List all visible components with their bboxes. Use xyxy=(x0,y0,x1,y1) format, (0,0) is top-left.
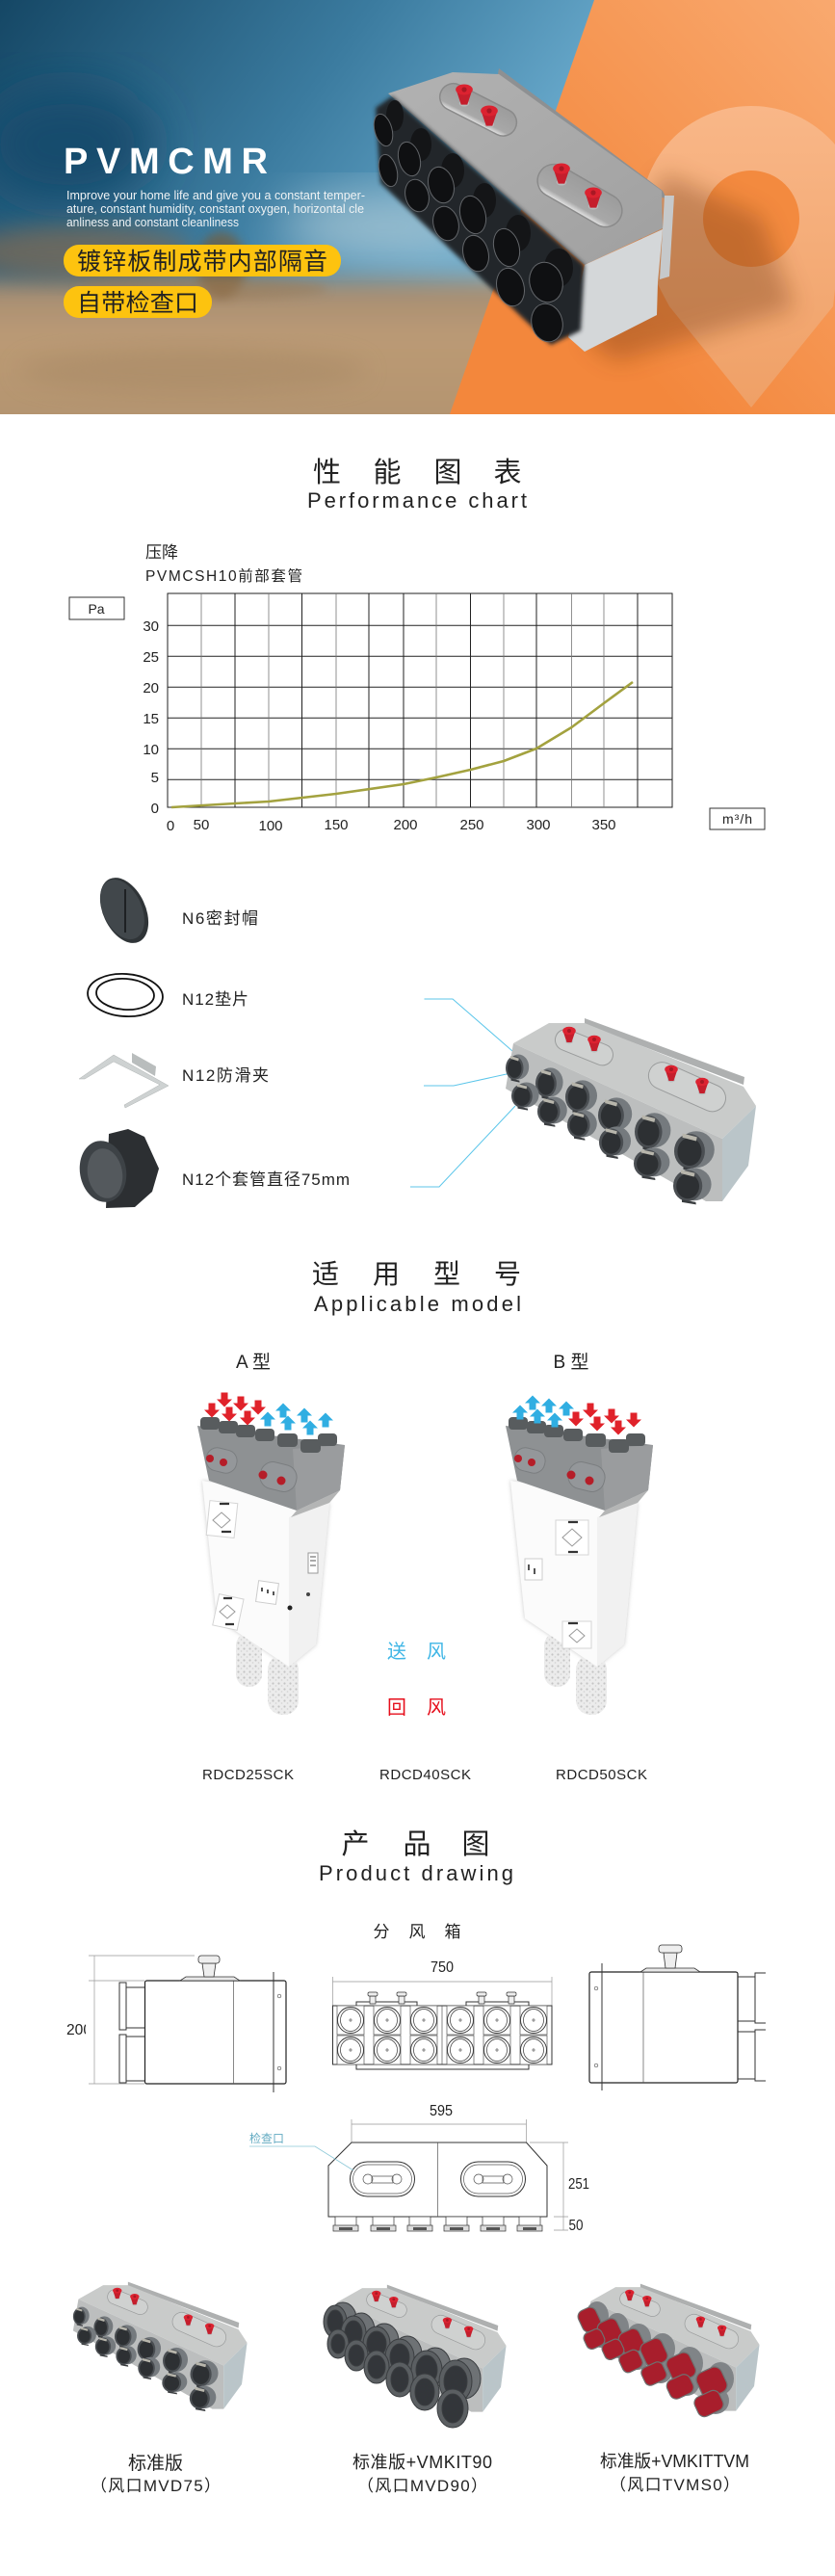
accessory: gasket: N12垫片 xyxy=(182,990,248,1009)
heading: product drawing: Product drawing xyxy=(319,1861,513,1885)
heading: applicable model: 适 xyxy=(312,1259,339,1289)
drawing: top view xyxy=(249,2103,589,2234)
x axis labels: 100 xyxy=(258,818,283,834)
x axis labels xyxy=(167,817,616,834)
x axis labels: 50 xyxy=(194,817,209,833)
accessory: gasket xyxy=(87,971,248,1019)
accessory: anti-slip clip: N12防滑夹 xyxy=(182,1066,269,1085)
hero description xyxy=(67,191,364,226)
x axis labels: 300 xyxy=(526,817,551,833)
model names: RDCD40SCK xyxy=(379,1767,471,1783)
chart titles xyxy=(145,543,302,585)
heading: applicable model: Applicable model xyxy=(314,1292,521,1316)
model names: RDCD50SCK xyxy=(556,1767,647,1783)
legend: return air: 回 xyxy=(387,1697,406,1719)
drawing: front view: 750 xyxy=(431,1959,454,1976)
product: standard + VMKITTVM: （风口TVMS0） xyxy=(610,2476,740,2494)
product: standard version xyxy=(73,2282,248,2495)
subheading: plenum box: 箱 xyxy=(445,1923,460,1941)
product: standard version: 标准版 xyxy=(128,2453,183,2474)
product: standard + VMKIT90: 标准版+VMKIT90 xyxy=(352,2453,492,2472)
inspection port callout xyxy=(249,2131,353,2170)
x axis labels: 250 xyxy=(459,817,484,833)
box shadow xyxy=(587,173,795,361)
hero description: Improve your home life and give you a constant temper- xyxy=(66,189,365,202)
heading: performance chart: Performance chart xyxy=(307,488,527,513)
hero description: anliness and constant cleanliness xyxy=(66,216,239,229)
product: standard + VMKITTVM: 标准版+VMKITTVM xyxy=(600,2452,749,2471)
unit: type A xyxy=(197,1393,345,1715)
heading: performance chart: 能 xyxy=(373,457,402,488)
drawing: top view: 595 xyxy=(430,2103,453,2119)
hero description: ature, constant humidity, constant oxygen, horizontal cle xyxy=(66,202,364,216)
pin hole xyxy=(703,171,799,267)
drawing: right side view xyxy=(589,1945,766,2090)
chart titles: PVMCSH10前部套管 xyxy=(145,567,302,585)
legend: return air: 风 xyxy=(427,1697,446,1719)
return air arrows xyxy=(204,1393,266,1426)
drawing: top view: 50 xyxy=(568,2218,584,2234)
model names: RDCD25SCK xyxy=(202,1767,294,1783)
accessory: sealing cap: N6密封帽 xyxy=(182,909,258,928)
unit: type B xyxy=(506,1395,653,1715)
hero title: PVMCMR xyxy=(64,142,268,182)
legend: supply air: 风 xyxy=(427,1642,446,1663)
heading: performance chart: 图 xyxy=(433,458,462,488)
y axis labels: 20 xyxy=(143,680,159,697)
y axis labels xyxy=(143,618,159,817)
badge: inspection port: 自带检查口 xyxy=(77,290,198,317)
unit box: m3/h xyxy=(710,808,765,829)
chart titles: 压降 xyxy=(145,543,178,562)
heading: applicable model: 号 xyxy=(494,1259,521,1289)
heading: product drawing: 图 xyxy=(461,1829,490,1860)
unit box: Pa xyxy=(69,597,124,619)
drawing: top view: 251 xyxy=(568,2176,589,2193)
heading: product drawing: 品 xyxy=(403,1829,431,1860)
hero background xyxy=(0,0,594,414)
model names xyxy=(202,1767,647,1783)
subheading: plenum box: 分 xyxy=(374,1923,389,1941)
accessory: sleeve: N12个套管直径75mm xyxy=(182,1170,350,1189)
curve xyxy=(171,682,633,807)
supply air arrows xyxy=(512,1395,574,1428)
hero banner xyxy=(0,0,835,414)
y axis labels: 30 xyxy=(143,618,159,635)
label: type A: A 型 xyxy=(236,1352,271,1373)
subheading: plenum box xyxy=(374,1923,460,1941)
y axis labels: 5 xyxy=(151,770,159,786)
legend: supply air xyxy=(387,1641,446,1663)
heading: performance chart: 表 xyxy=(493,457,522,488)
x axis labels: 200 xyxy=(393,817,418,833)
x axis labels: 0 xyxy=(167,818,174,834)
heading: performance chart xyxy=(307,457,527,513)
y axis labels: 15 xyxy=(143,711,159,727)
unit box: m3/h: m³/h xyxy=(722,811,753,827)
legend: supply air: 送 xyxy=(387,1641,406,1663)
orange panel xyxy=(450,0,835,414)
heading: applicable model xyxy=(312,1259,521,1316)
subheading: plenum box: 风 xyxy=(408,1923,426,1941)
accessory: sealing cap xyxy=(91,870,258,951)
line chart: pressure drop xyxy=(69,593,765,834)
x axis labels: 150 xyxy=(324,817,349,833)
badge: galvanized sheet: 镀锌板制成带内部隔音 xyxy=(77,249,327,276)
product: standard version: （风口MVD75） xyxy=(91,2477,221,2495)
label: type B: B 型 xyxy=(554,1352,588,1373)
hero product: ceiling plenum box xyxy=(371,68,674,352)
y axis labels: 25 xyxy=(143,649,159,666)
x axis labels: 350 xyxy=(591,817,616,833)
drawing: left side view: 200 xyxy=(66,2022,91,2038)
unit box: Pa: Pa xyxy=(88,601,105,617)
product: standard + VMKITTVM xyxy=(576,2284,760,2494)
product view with callouts xyxy=(506,1018,756,1204)
product: standard + VMKIT90 xyxy=(324,2285,507,2495)
drawing: front view xyxy=(333,1959,552,2069)
location pin xyxy=(640,106,835,407)
legend: return air xyxy=(387,1697,446,1719)
return air arrows xyxy=(568,1403,641,1435)
drawing: left side view xyxy=(66,1956,286,2092)
heading: product drawing: 产 xyxy=(341,1828,370,1860)
heading: applicable model: 用 xyxy=(373,1259,400,1289)
accessory: sleeve xyxy=(75,1129,350,1208)
accessory: anti-slip clip xyxy=(79,1053,269,1108)
heading: product drawing xyxy=(319,1828,513,1885)
supply air arrows xyxy=(260,1403,333,1435)
inspection port callout: 检查口 xyxy=(249,2131,284,2145)
leader lines xyxy=(410,999,515,1187)
y axis labels: 0 xyxy=(151,801,159,817)
badge: inspection port xyxy=(64,286,212,318)
heading: applicable model: 型 xyxy=(433,1259,460,1289)
heading: performance chart: 性 xyxy=(313,457,341,488)
product: standard + VMKIT90: （风口MVD90） xyxy=(357,2477,487,2495)
y axis labels: 10 xyxy=(143,742,159,758)
